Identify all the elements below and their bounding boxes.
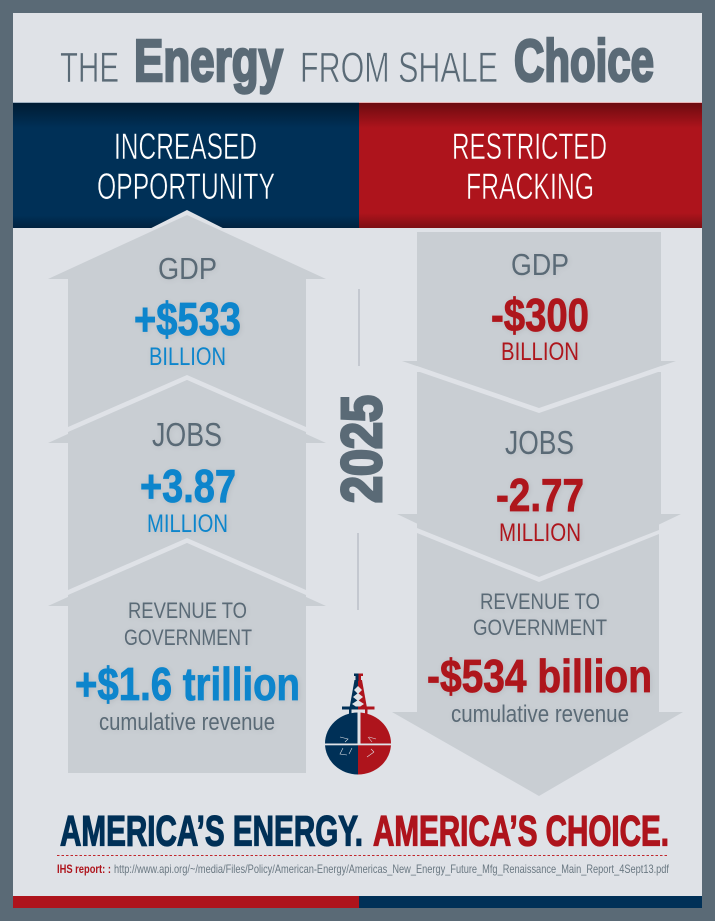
arrow: GDP down: GDP: [511, 247, 569, 282]
arrow: GDP down: BILLION: [501, 338, 579, 366]
arrow: jobs down: [397, 372, 681, 582]
panel: restricted fracking arrows: [392, 232, 683, 796]
slogan: AMERICA’S ENERGY.: [60, 808, 363, 856]
arrow: jobs down: -2.77: [496, 469, 584, 521]
arrow: GDP up: [44, 210, 330, 440]
dotted divider: [57, 854, 669, 856]
arrow: GDP up: +$533: [134, 293, 241, 345]
arrow: revenue up: cumulative revenue: [99, 709, 275, 736]
arrow: GDP up: BILLION: [149, 343, 226, 371]
panel: restricted fracking header: FRACKING: [466, 166, 594, 207]
panel: increased opportunity header: INCREASED: [114, 126, 257, 167]
arrow: jobs up: [48, 375, 326, 600]
arrow: revenue up: +$1.6 trillion: [75, 658, 300, 710]
arrow: revenue down: GOVERNMENT: [473, 615, 607, 640]
source citation: IHS report: :: [57, 862, 111, 876]
arrow: jobs up: +3.87: [140, 460, 236, 512]
title: FROM SHALE: [300, 44, 498, 92]
panel: increased opportunity header: OPPORTUNITY: [97, 166, 275, 207]
title: Energy: [134, 28, 283, 94]
arrow: jobs up: JOBS: [152, 416, 222, 453]
arrow: revenue up: GOVERNMENT: [124, 625, 252, 650]
panel: increased opportunity arrows: [44, 210, 330, 773]
title: THE: [60, 44, 119, 92]
panel: increased opportunity header: [13, 102, 359, 228]
arrow: jobs down: MILLION: [499, 519, 581, 547]
footer colour bar: [13, 896, 702, 908]
arrow: revenue down: cumulative revenue: [451, 701, 629, 728]
arrow: GDP down: -$300: [491, 289, 589, 341]
panel: restricted fracking header: RESTRICTED: [452, 126, 607, 167]
arrow: GDP up: GDP: [158, 251, 217, 286]
title: [60, 28, 654, 94]
arrow: revenue up: [48, 538, 326, 773]
arrow: GDP down: [402, 232, 676, 413]
arrow: revenue down: -$534 billion: [427, 650, 652, 702]
arrow: revenue down: [392, 520, 683, 796]
arrow: jobs up: MILLION: [147, 510, 228, 538]
title: Choice: [514, 28, 654, 94]
panel: restricted fracking header: [359, 102, 702, 228]
arrow: revenue down: REVENUE TO: [480, 589, 600, 614]
arrow: revenue up: REVENUE TO: [128, 598, 247, 623]
arrow: jobs down: JOBS: [505, 424, 574, 461]
icon: oil derrick on globe: [325, 674, 391, 774]
timeline year: 2025: [330, 395, 394, 503]
